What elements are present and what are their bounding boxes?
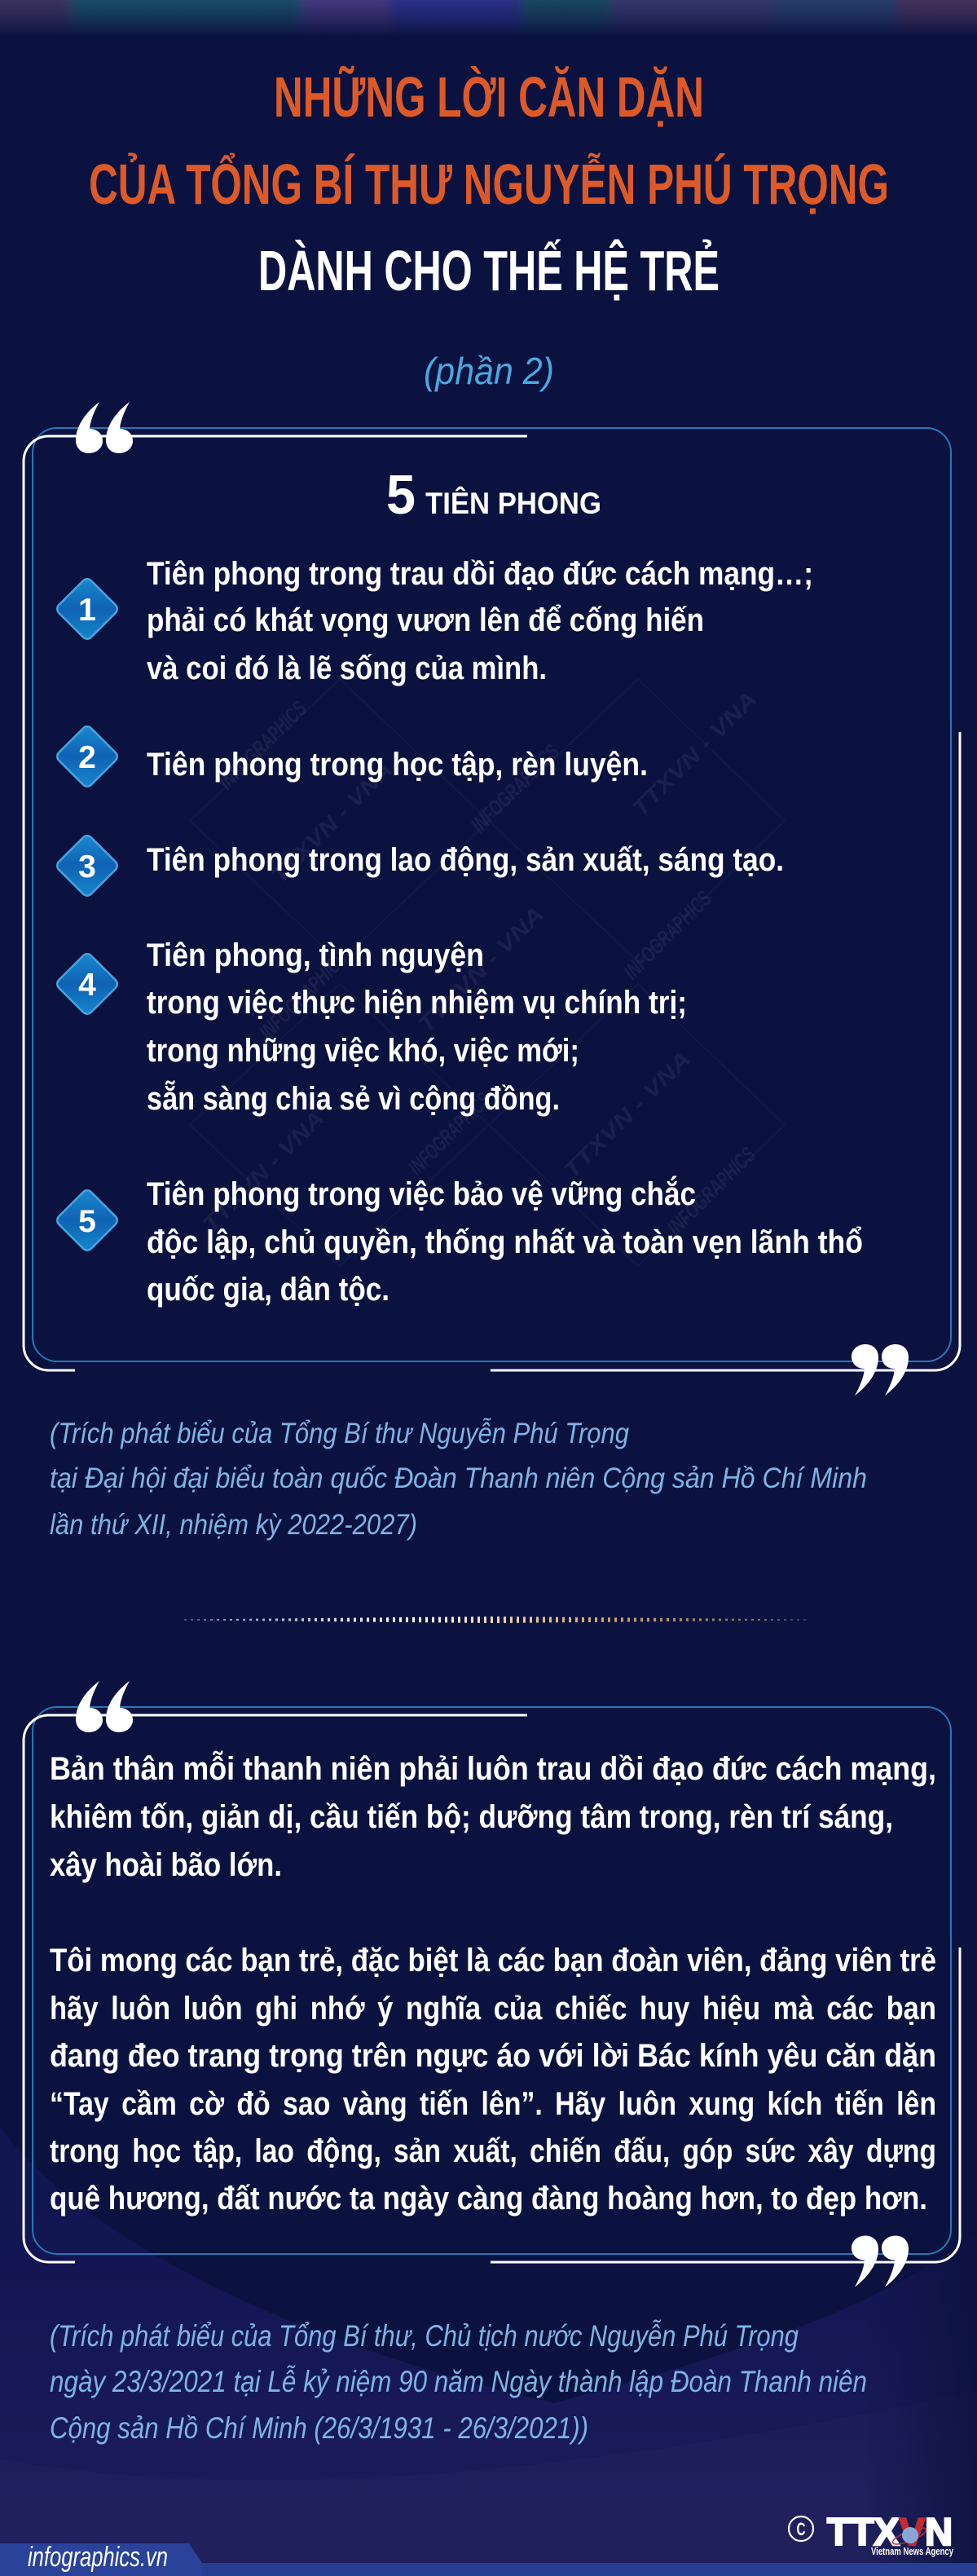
watermarks: TTXVN - VNA bbox=[627, 686, 762, 821]
item 2: Tiên phong trong học tập, rèn luyện. bbox=[147, 747, 648, 783]
item 5: quốc gia, dân tộc. bbox=[147, 1272, 389, 1308]
panel frame bbox=[24, 428, 960, 1370]
panel: 5 tien phong bbox=[24, 402, 960, 1396]
item 5: Tiên phong trong việc bảo vệ vững chắc bbox=[147, 1175, 696, 1212]
item 4: sẵn sàng chia sẻ vì cộng đồng. bbox=[147, 1079, 560, 1117]
watermarks: TTXVN - VNA bbox=[198, 1106, 329, 1237]
item 3 bbox=[55, 833, 784, 898]
dotted divider bbox=[184, 1617, 807, 1623]
item 2: 2 bbox=[78, 740, 96, 775]
text block: paragraph 2 bbox=[50, 1943, 936, 2217]
citation 1 bbox=[50, 1418, 867, 1541]
item 5: 5 bbox=[78, 1204, 96, 1239]
item 5 bbox=[55, 1175, 863, 1308]
title: DÀNH CHO THẾ HỆ TRẺ bbox=[258, 238, 720, 302]
watermarks bbox=[190, 679, 785, 1266]
citation 1: lần thứ XII, nhiệm kỳ 2022-2027) bbox=[50, 1509, 417, 1541]
watermarks: INFOGRAPHICS bbox=[662, 1142, 760, 1240]
panel heading bbox=[386, 464, 601, 526]
citation 2: Cộng sản Hồ Chí Minh (26/3/1931 - 26/3/2021)) bbox=[50, 2411, 588, 2445]
watermarks: INFOGRAPHICS bbox=[213, 696, 311, 794]
icon: opening quote bbox=[76, 1681, 133, 1732]
item 4: 4 bbox=[78, 968, 96, 1003]
title bbox=[89, 65, 889, 302]
background swoosh at bottom bbox=[0, 2127, 977, 2576]
logo: TTXVN: TTXVN bbox=[827, 2510, 953, 2553]
item 1: và coi đó là lẽ sống của mình. bbox=[147, 651, 547, 686]
subtitle: (phần 2) bbox=[424, 350, 554, 392]
title: NHỮNG LỜI CĂN DẶN bbox=[274, 65, 704, 129]
watermarks: INFOGRAPHICS bbox=[466, 739, 564, 837]
watermarks: TTXVN - VNA bbox=[413, 902, 548, 1037]
citation 2: (Trích phát biểu của Tổng Bí thư, Chủ tịch nước Nguyễn Phú Trọng bbox=[50, 2319, 799, 2353]
panel heading: TIÊN PHONG bbox=[425, 486, 601, 520]
item 1: Tiên phong trong trau dồi đạo đức cách mạng…; bbox=[147, 556, 813, 592]
item 3: Tiên phong trong lao động, sản xuất, sáng tạo. bbox=[147, 842, 784, 878]
item 5: độc lập, chủ quyền, thống nhất và toàn vẹn lãnh thổ bbox=[147, 1224, 863, 1260]
logo: TTXVN: C bbox=[797, 2519, 806, 2539]
watermarks: INFOGRAPHICS bbox=[618, 886, 716, 984]
top photo strip bbox=[0, 0, 977, 78]
watermarks: INFOGRAPHICS bbox=[403, 1087, 495, 1180]
watermarks: INFOGRAPHICS bbox=[254, 946, 352, 1044]
item 3: 3 bbox=[78, 849, 96, 884]
item 1: 1 bbox=[78, 593, 96, 628]
watermarks: TTXVN - VNA bbox=[559, 1047, 696, 1183]
citation 2 bbox=[50, 2319, 867, 2445]
item 4: trong việc thực hiện nhiệm vụ chính trị; bbox=[147, 985, 687, 1021]
panel heading: 5 bbox=[386, 464, 416, 526]
text block: paragraph 1: xây hoài bão lớn. bbox=[50, 1847, 282, 1883]
watermarks: TTXVN - VNA bbox=[266, 757, 398, 888]
item 4: trong những việc khó, việc mới; bbox=[147, 1033, 579, 1069]
citation 1: (Trích phát biểu của Tổng Bí thư Nguyễn Phú Trọng bbox=[50, 1418, 629, 1449]
item 4 bbox=[55, 937, 687, 1117]
item 2 bbox=[55, 724, 648, 789]
icon: closing quote bbox=[852, 1344, 909, 1396]
item 1 bbox=[55, 556, 813, 686]
panel: quote 2 bbox=[24, 1681, 960, 2287]
panel frame bbox=[24, 1707, 960, 2262]
website label: infographics.vn bbox=[28, 2542, 168, 2573]
citation 1: tại Đại hội đại biểu toàn quốc Đoàn Thanh niên Cộng sản Hồ Chí Minh bbox=[50, 1462, 867, 1494]
logo: TTXVN bbox=[789, 2510, 954, 2557]
icon: closing quote bbox=[852, 2235, 909, 2287]
item 4: Tiên phong, tình nguyện bbox=[147, 937, 484, 973]
footer bar bbox=[0, 2542, 977, 2576]
text block: paragraph 1 bbox=[50, 1749, 936, 1883]
item 1: phải có khát vọng vươn lên để cống hiến bbox=[147, 602, 704, 638]
icon: opening quote bbox=[76, 402, 133, 453]
